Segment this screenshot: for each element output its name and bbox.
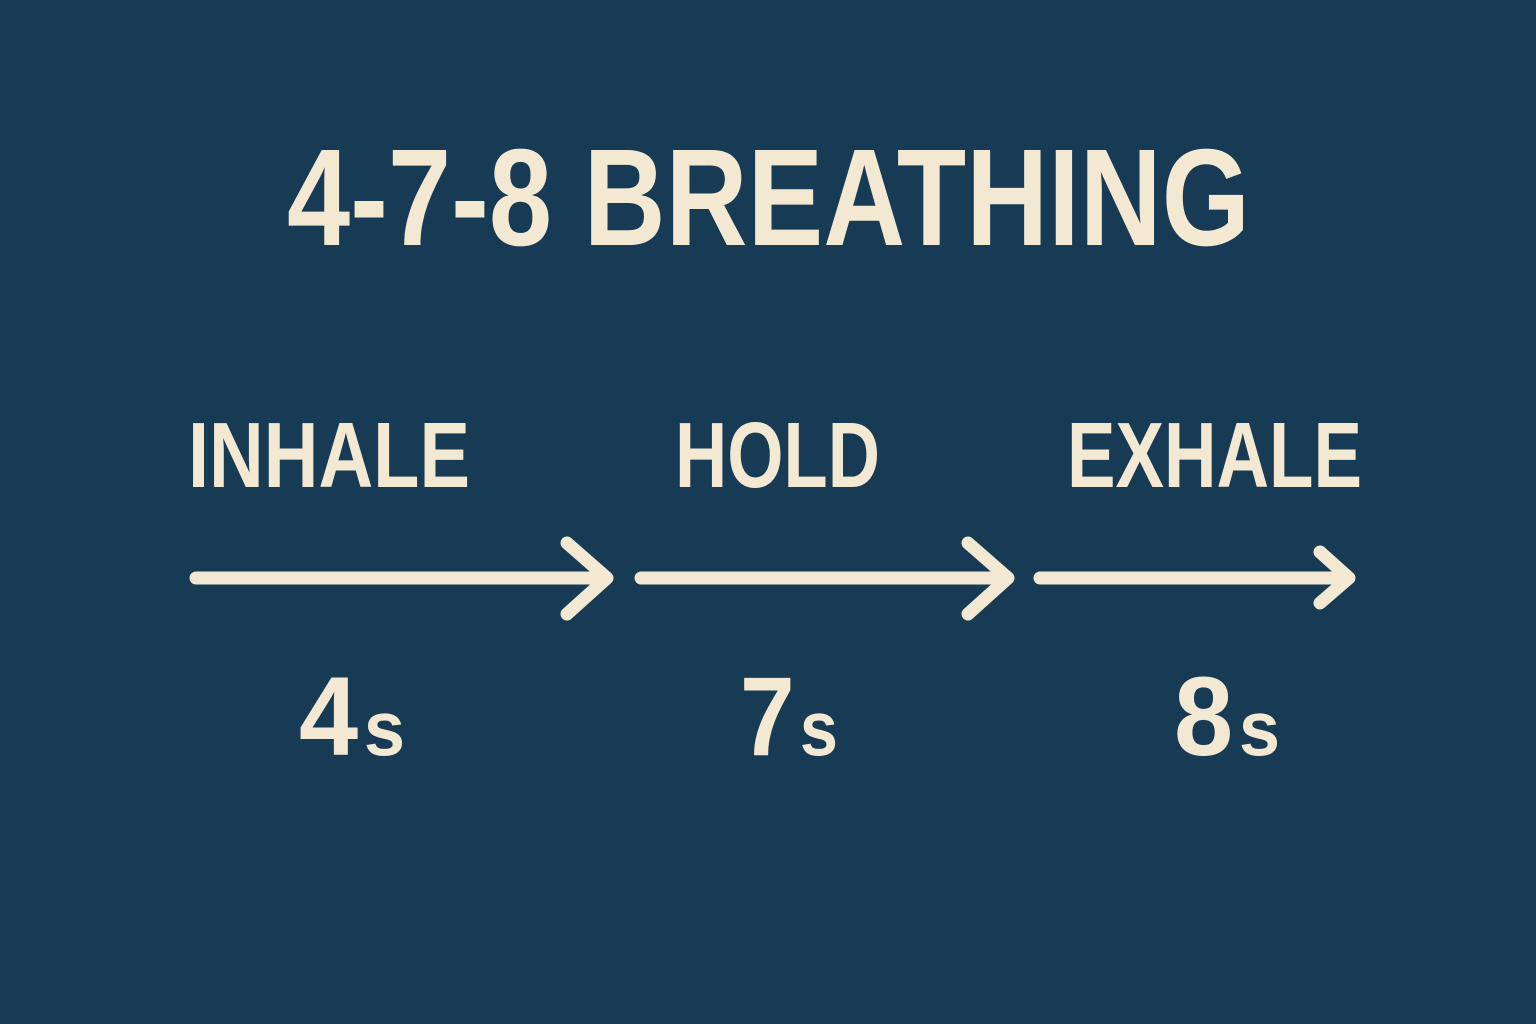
title: 4-7-8 BREATHING — [287, 121, 1250, 275]
arrow: inhale — [196, 543, 607, 614]
label: inhale: INHALE — [188, 403, 470, 507]
duration: 4s: 4s — [299, 654, 405, 779]
duration: 7s: 7s — [740, 654, 838, 779]
arrow: hold — [641, 543, 1008, 614]
label: exhale: EXHALE — [1067, 403, 1362, 507]
arrow: exhale — [1040, 552, 1349, 603]
label: hold: HOLD — [675, 403, 880, 507]
duration: 8s: 8s — [1174, 654, 1280, 779]
